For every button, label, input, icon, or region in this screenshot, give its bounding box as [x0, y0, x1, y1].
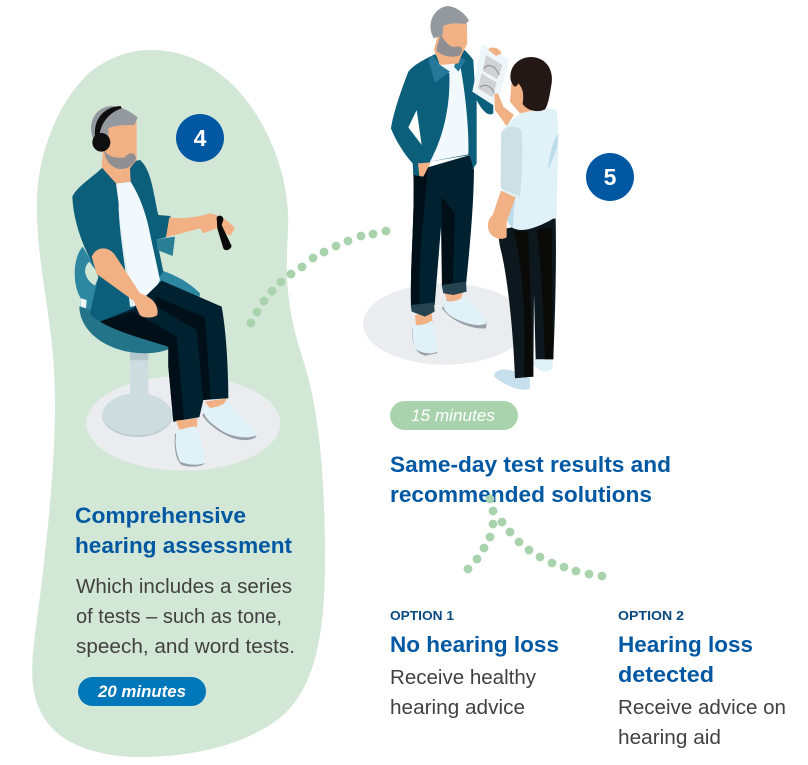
step badge 4 — [176, 114, 224, 162]
illustration: seated man wearing headphones — [72, 106, 280, 471]
heading: comprehensive hearing assessment: hearing assessment — [75, 533, 293, 558]
option 2 heading: Hearing loss — [618, 632, 753, 657]
woman's head — [510, 57, 552, 113]
option 1 description — [390, 667, 536, 719]
right hand and arm — [92, 248, 158, 318]
man's shoes — [412, 292, 487, 356]
dotted path between steps 4 and 5 — [247, 227, 390, 327]
option 2 description — [618, 697, 786, 749]
option 1 description: Receive healthy — [390, 667, 536, 689]
trousers — [100, 281, 228, 422]
step badge 5: 5 — [604, 164, 617, 190]
woman's trousers — [499, 218, 556, 378]
step badge 5 — [586, 153, 634, 201]
option 1 heading: No hearing loss — [390, 632, 559, 657]
option 2 — [618, 608, 786, 749]
option 2 heading: detected — [618, 662, 714, 687]
text: assessment description: speech, and word tests. — [76, 636, 295, 658]
woman's pointing arm — [494, 93, 514, 126]
clicker — [217, 216, 232, 250]
heading: same-day test results — [390, 452, 671, 507]
option 2 label: OPTION 2 — [618, 608, 684, 623]
hand in pocket — [418, 162, 431, 177]
text: assessment description: of tests – such as tone, — [76, 606, 282, 628]
heading: comprehensive hearing assessment — [75, 503, 293, 558]
option 1 description: hearing advice — [390, 697, 525, 719]
outstretched arm and hand — [166, 213, 235, 237]
man's jacket — [391, 47, 493, 177]
illustration: man and woman reviewing results — [363, 6, 559, 390]
pill: 15 minutes: 15 minutes — [411, 406, 495, 425]
option 1 — [390, 608, 559, 719]
man's head — [431, 6, 469, 65]
option 1 label: OPTION 1 — [390, 608, 454, 623]
woman's shoes — [533, 358, 553, 372]
floor shadow — [86, 376, 280, 471]
step badge 4: 4 — [194, 125, 207, 151]
chair seat and back — [75, 247, 200, 353]
white t-shirt — [116, 182, 160, 307]
panel: green blob background — [32, 50, 325, 757]
text: assessment description: Which includes a series — [76, 576, 292, 598]
option 2 description: hearing aid — [618, 727, 721, 749]
heading: comprehensive hearing assessment: Comprehensive — [75, 503, 246, 528]
pill: 20 minutes: 20 minutes — [97, 682, 186, 701]
floor shadow — [363, 283, 527, 365]
man — [391, 6, 493, 356]
results sheet — [472, 43, 509, 107]
chair stand — [102, 352, 172, 437]
option 2 description: Receive advice on — [618, 697, 786, 719]
woman's blouse — [502, 108, 558, 230]
option 2 heading — [618, 632, 753, 687]
pill: 15 minutes — [390, 401, 518, 430]
jacket — [72, 160, 171, 322]
woman — [488, 57, 559, 390]
man's trousers — [411, 155, 474, 305]
jacket collar — [428, 55, 450, 83]
head — [91, 106, 138, 183]
shoes — [175, 398, 257, 467]
text: assessment description — [76, 576, 295, 658]
dotted branches to options — [464, 495, 606, 580]
woman's arm — [488, 191, 516, 239]
heading: same-day test results: Same-day test results and — [390, 452, 671, 477]
man's t-shirt — [430, 57, 468, 162]
heading: same-day test results: recommended solutions — [390, 482, 652, 507]
pill: 20 minutes — [78, 677, 206, 706]
